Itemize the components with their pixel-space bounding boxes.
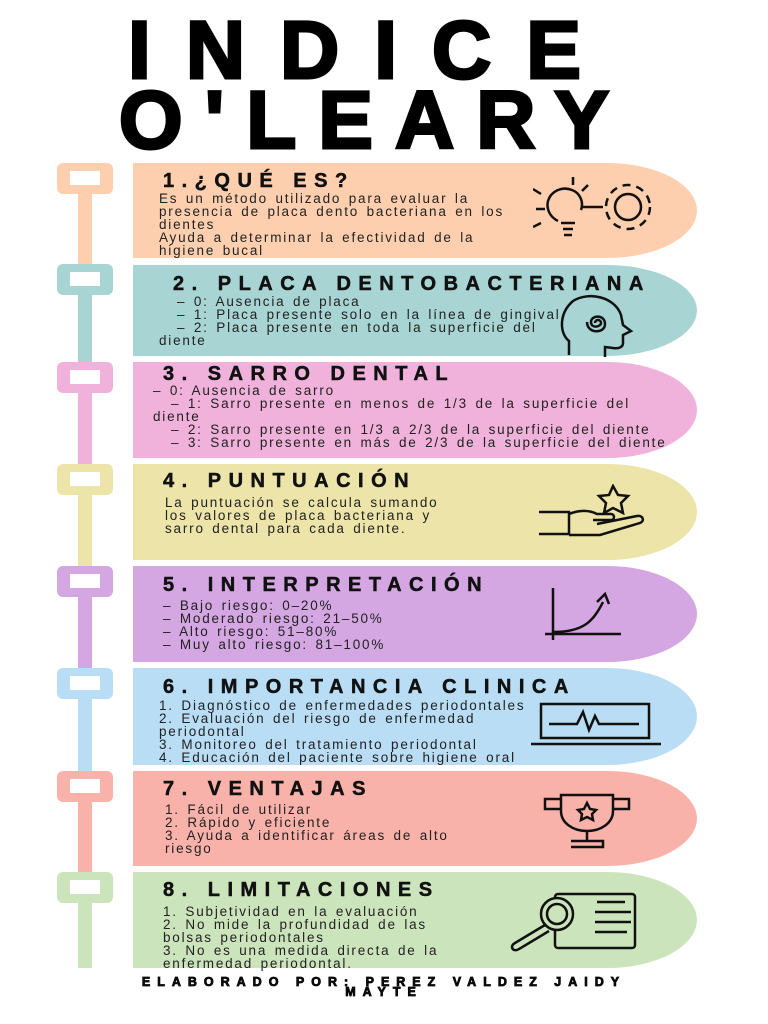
panel: placa: diente [159, 333, 207, 348]
panel: limitaciones: 2. No mide la profundidad de las [163, 917, 427, 932]
panel: interpretacion: – Moderado riesgo: 21–50% [163, 611, 384, 626]
icon: magnifier document [510, 892, 636, 952]
panel: sarro: – 2: Sarro presente en 1/3 a 2/3 de la superficie del diente [171, 422, 650, 437]
panel: limitaciones: 3. No es una medida directa de la [163, 943, 438, 958]
icon: growth chart [545, 588, 621, 640]
panel: sarro: – 0: Ausencia de sarro [153, 383, 335, 398]
panel: ventajas: 7. VENTAJAS [163, 778, 373, 800]
icon: trophy [544, 794, 630, 848]
panel: limitaciones: 8. LIMITACIONES [163, 879, 440, 901]
panel: placa: – 2: Placa presente en toda la superficie del [177, 320, 537, 335]
footer: MAYTE [345, 985, 423, 999]
icon: monitor [531, 702, 661, 746]
panel: limitaciones: 1. Subjetividad en la evaluación [163, 904, 418, 919]
panel: puntuacion: sarro dental para cada diente. [165, 521, 406, 536]
panel: puntuacion: La puntuación se calcula sumando [165, 495, 438, 510]
panel: importancia: periodontal [159, 724, 246, 739]
title: INDICE [128, 5, 616, 96]
panel: puntuacion: 4. PUNTUACIÓN [163, 470, 416, 492]
panel: interpretacion [133, 566, 697, 662]
panel: importancia: 2. Evaluación del riesgo de enfermedad [159, 711, 475, 726]
panel: importancia: 4. Educación del paciente sobre higiene oral [159, 750, 516, 765]
timeline [57, 163, 113, 194]
panel: ventajas: 1. Fácil de utilizar [165, 802, 312, 817]
panel: que es: higiene bucal [159, 243, 264, 258]
panel: placa [133, 265, 697, 356]
panel: placa: – 0: Ausencia de placa [177, 294, 360, 309]
title [119, 5, 631, 166]
panel: sarro: 3. SARRO DENTAL [163, 363, 455, 385]
panel: sarro [133, 362, 697, 458]
panel: que es: 1.¿QUÉ ES? [163, 170, 355, 192]
panel: placa: 2. PLACA DENTOBACTERIANA [173, 273, 651, 295]
panel: sarro: – 3: Sarro presente en más de 2/3 de la superficie del diente [171, 435, 667, 450]
panel: interpretacion: – Bajo riesgo: 0–20% [163, 598, 333, 613]
panel: que es: presencia de placa dento bacteriana en los [159, 204, 504, 219]
panel: sarro: – 1: Sarro presente en menos de 1/3 de la superficie del [171, 396, 630, 411]
panel: puntuacion: los valores de placa bacteriana y [165, 508, 431, 523]
title: O'LEARY [119, 75, 631, 166]
panel: que es: Ayuda a determinar la efectividad de la [159, 230, 474, 245]
panel: ventajas: 3. Ayuda a identificar áreas de alto [165, 828, 449, 843]
panel: que es: Es un método utilizado para evaluar la [159, 191, 469, 206]
panel: interpretacion: 5. INTERPRETACIÓN [163, 574, 489, 596]
panel: sarro: diente [153, 409, 201, 424]
panel: limitaciones: bolsas periodontales [163, 930, 325, 945]
panel: limitaciones [133, 872, 697, 968]
icon: hand star [539, 484, 644, 536]
panel: puntuacion [133, 464, 697, 560]
footer: ELABORADO POR: PEREZ VALDEZ JAIDY [142, 975, 626, 989]
panel: importancia [133, 668, 697, 765]
icon: bulb gear [533, 177, 652, 236]
panel: interpretacion: – Muy alto riesgo: 81–100% [163, 637, 385, 652]
panel: ventajas [133, 771, 697, 866]
footer [142, 975, 626, 999]
panel: placa: – 1: Placa presente solo en la línea de gingival [177, 307, 561, 322]
panel: ventajas: 2. Rápido y eficiente [165, 815, 331, 830]
panel: que es: dientes [159, 217, 215, 232]
panel: que es [133, 163, 697, 258]
panel: interpretacion: – Alto riesgo: 51–80% [163, 624, 338, 639]
icon: head [560, 294, 634, 357]
panel: ventajas: riesgo [165, 841, 213, 856]
panel: importancia: 6. IMPORTANCIA CLINICA [163, 676, 576, 698]
panel: importancia: 3. Monitoreo del tratamiento periodontal [159, 737, 478, 752]
panel: importancia: 1. Diagnóstico de enfermedades periodontales [159, 698, 525, 713]
panel: limitaciones: enfermedad periodontal. [163, 956, 353, 971]
